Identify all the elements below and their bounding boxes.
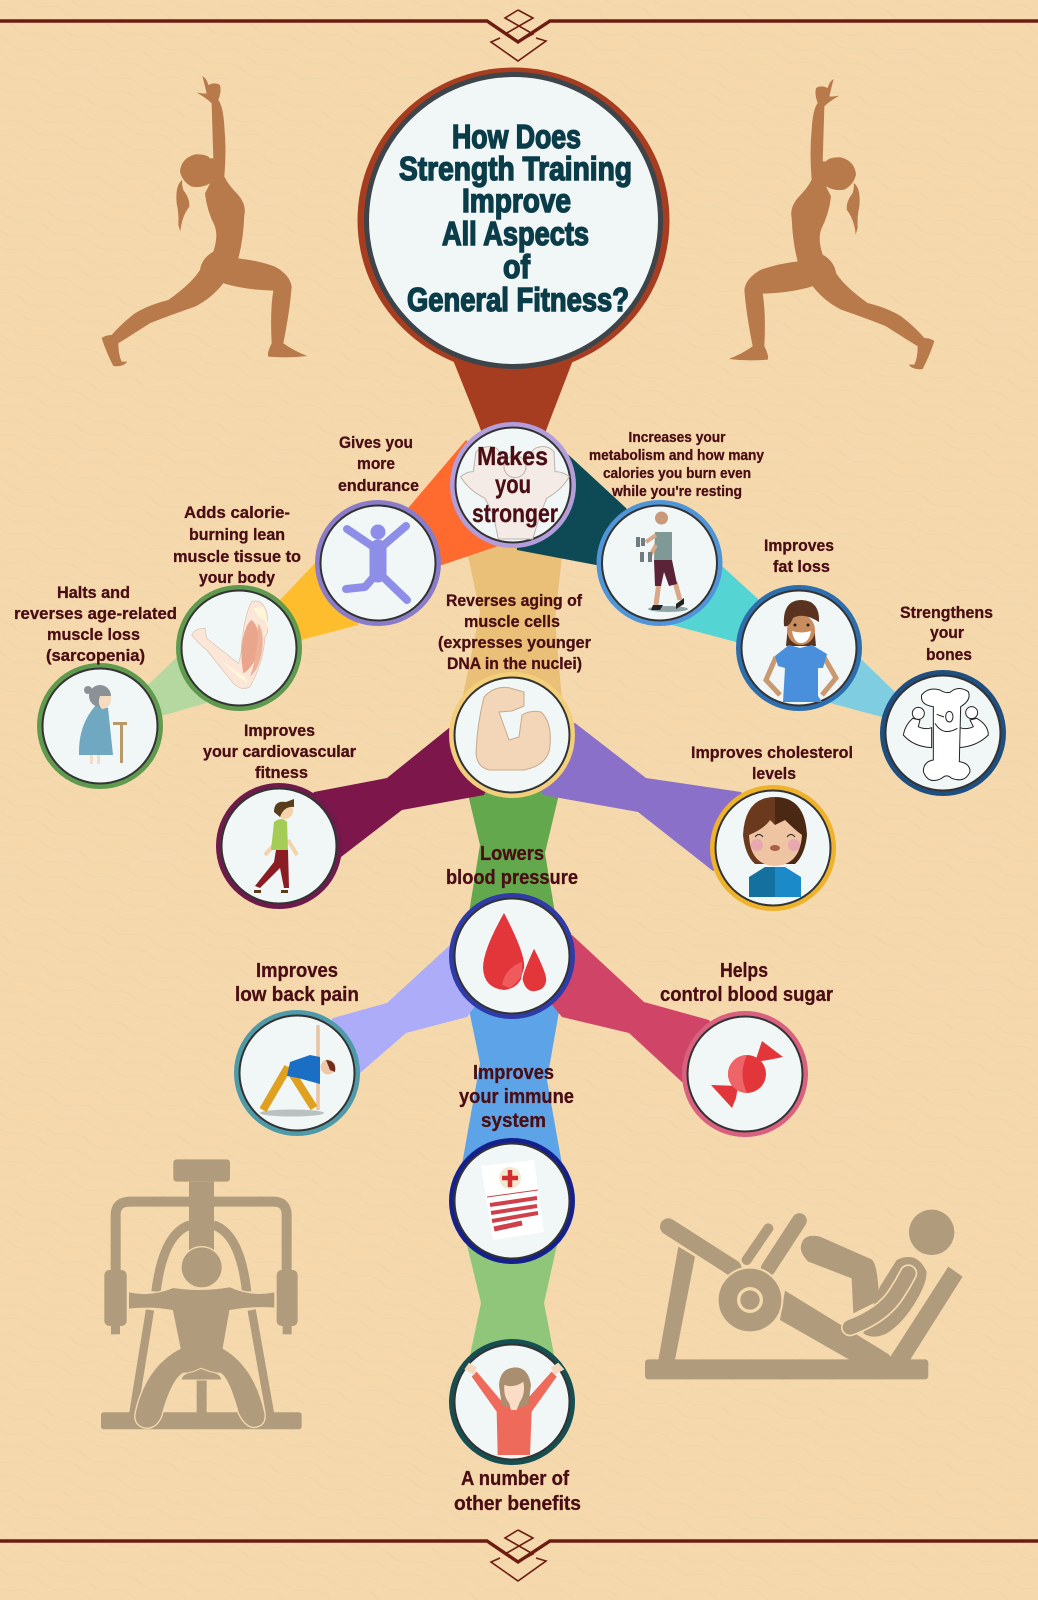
label: [173, 503, 301, 587]
title: General Fitness?: [407, 281, 629, 318]
label: metabolism and how many: [589, 447, 765, 464]
connector bands: [100, 355, 943, 1365]
label: control blood sugar: [660, 984, 833, 1006]
label: [235, 960, 359, 1006]
label: levels: [752, 764, 796, 783]
node: endurance: [318, 433, 438, 623]
icon: woman with dumbbells: [638, 512, 688, 612]
label: muscle loss: [47, 625, 140, 644]
label: Improves cholesterol: [691, 743, 853, 762]
node: cardiovascular: [203, 721, 356, 906]
top ornament: [0, 10, 1038, 61]
silhouette: leg press machine: [645, 1210, 963, 1379]
icon: jumping figure: [346, 524, 407, 600]
label: Gives you: [339, 433, 413, 452]
label: while you're resting: [611, 483, 742, 500]
title: Strength Training: [399, 150, 632, 187]
label: [691, 743, 853, 783]
label: calories you burn even: [603, 465, 751, 482]
icon: smiling girl: [743, 797, 807, 897]
label: system: [481, 1110, 546, 1132]
label: low back pain: [235, 984, 359, 1006]
node: immune system: [452, 1062, 574, 1261]
title medallion: [358, 68, 670, 374]
label: Halts and: [57, 583, 130, 602]
label: [454, 1468, 581, 1515]
node: fat loss: [739, 536, 859, 708]
node: bones: [883, 603, 1003, 793]
label: stronger: [472, 498, 558, 528]
label: you: [495, 469, 531, 499]
icon: walking boy: [254, 799, 297, 893]
label: [660, 960, 833, 1006]
label: [203, 721, 356, 782]
label: [446, 843, 578, 889]
icon: medical report: [481, 1160, 544, 1240]
label: Helps: [720, 960, 768, 982]
label: your cardiovascular: [203, 742, 356, 761]
label: A number of: [461, 1468, 569, 1490]
node: metabolism: [589, 429, 765, 623]
label: Lowers: [480, 843, 544, 865]
label: Adds calorie-: [184, 503, 290, 522]
silhouette: yoga pose right: [729, 79, 934, 369]
node: sarcopenia: [14, 583, 177, 786]
icon: arm anatomy: [192, 601, 270, 689]
label: blood pressure: [446, 867, 578, 889]
node: blood pressure: [446, 843, 578, 1016]
label: other benefits: [454, 1493, 581, 1515]
label: Improves: [473, 1062, 554, 1084]
label: [14, 583, 177, 665]
label: Improves: [764, 536, 834, 555]
title: of: [503, 248, 531, 285]
label: Reverses aging of: [446, 591, 582, 610]
node: other benefits: [452, 1342, 581, 1515]
label: your immune: [459, 1086, 574, 1108]
label: more: [357, 454, 395, 473]
label: Improves: [256, 960, 338, 982]
title: [399, 118, 632, 318]
silhouette: yoga pose left: [102, 76, 307, 366]
label: (sarcopenia): [46, 646, 145, 665]
label: muscle tissue to: [173, 547, 301, 566]
label: Improves: [244, 721, 315, 740]
label: Increases your: [628, 429, 726, 446]
label: your body: [199, 568, 276, 587]
label: endurance: [338, 476, 419, 495]
label: fat loss: [773, 557, 830, 576]
label: reverses age-related: [14, 604, 177, 623]
node: aging: [438, 591, 591, 795]
label: [589, 429, 765, 500]
node: makes you stronger: [453, 425, 573, 545]
node: lean muscle: [173, 503, 301, 708]
label: fitness: [255, 763, 308, 782]
label: DNA in the nuclei): [447, 654, 582, 673]
label: bones: [926, 645, 972, 664]
label: (expresses younger: [438, 633, 591, 652]
icon: woman with raised arms: [464, 1363, 564, 1455]
label: [438, 591, 591, 673]
label: Strengthens: [900, 603, 993, 622]
icon: flexing bone: [903, 688, 988, 781]
bottom ornament: [0, 1530, 1038, 1581]
icon: smiling woman: [766, 600, 836, 702]
node: cholesterol: [691, 743, 853, 908]
label: your: [930, 623, 964, 642]
label: [900, 603, 993, 664]
label: [472, 441, 558, 528]
node: low back pain: [235, 960, 359, 1133]
icon: stretching figure: [260, 1025, 336, 1116]
label: Makes: [477, 441, 548, 471]
icon: blood drops: [483, 913, 547, 992]
label: muscle cells: [464, 612, 560, 631]
title ring: [358, 68, 670, 374]
title: All Aspects: [442, 215, 589, 252]
title disc: [366, 74, 660, 366]
node: blood sugar: [660, 960, 833, 1134]
icon: elderly woman: [79, 685, 127, 764]
icon: muscular torso: [461, 446, 569, 539]
icon: candy: [711, 1041, 783, 1108]
label: burning lean: [189, 525, 285, 544]
silhouette: chest press machine: [101, 1159, 302, 1429]
label: [764, 536, 834, 576]
title: Improve: [462, 182, 571, 219]
icon: flexed arm: [476, 687, 550, 770]
label: [338, 433, 419, 495]
label: [459, 1062, 574, 1132]
title: How Does: [452, 118, 581, 155]
